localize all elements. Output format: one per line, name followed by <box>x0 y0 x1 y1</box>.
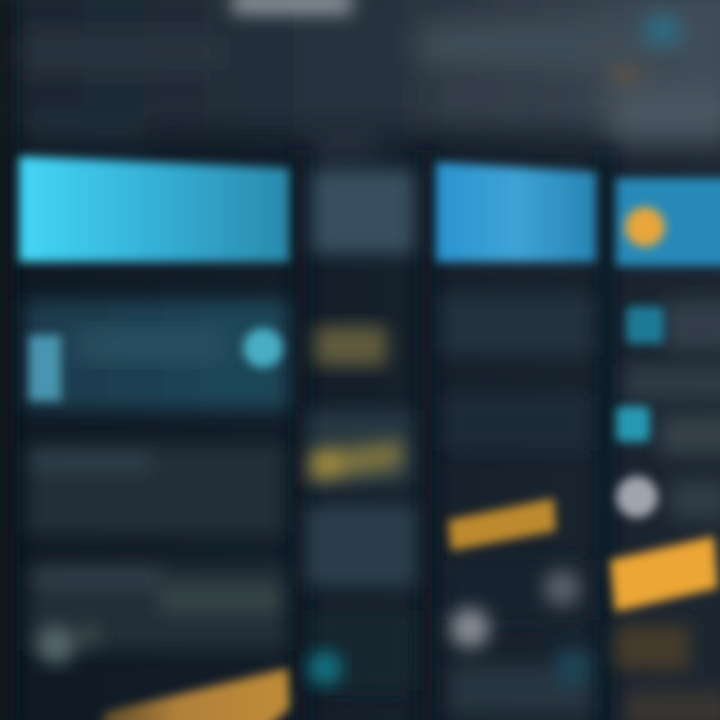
icon: orange circle <box>625 207 665 247</box>
row text blur <box>75 330 225 360</box>
icon: teal squares <box>616 306 664 442</box>
icon: white dot <box>616 476 658 518</box>
panel: middle column rows <box>306 410 416 690</box>
icon: grey dots <box>450 569 581 648</box>
top header band <box>0 0 720 160</box>
yellow badge <box>310 440 402 482</box>
top highlight <box>232 0 680 83</box>
panel: blue header bar <box>436 162 596 262</box>
panel: third column rows <box>442 295 592 715</box>
icon: teal dot <box>308 651 342 685</box>
orange badge <box>448 498 556 551</box>
panel: right blue header bar <box>616 178 720 266</box>
panel: cyan header bar <box>19 156 289 262</box>
panel: teal feature row <box>25 300 287 410</box>
row light bar <box>29 335 61 401</box>
icon: grey dot <box>37 625 100 664</box>
orange bar bottom left <box>100 668 290 720</box>
panel: right column rows <box>615 300 720 720</box>
panel: grey rows left <box>28 445 285 650</box>
mustard badge <box>315 326 387 366</box>
bright orange badge <box>610 536 718 612</box>
icon: cyan dot <box>243 328 283 368</box>
panel: grey header block <box>312 170 414 254</box>
row background <box>25 300 287 410</box>
